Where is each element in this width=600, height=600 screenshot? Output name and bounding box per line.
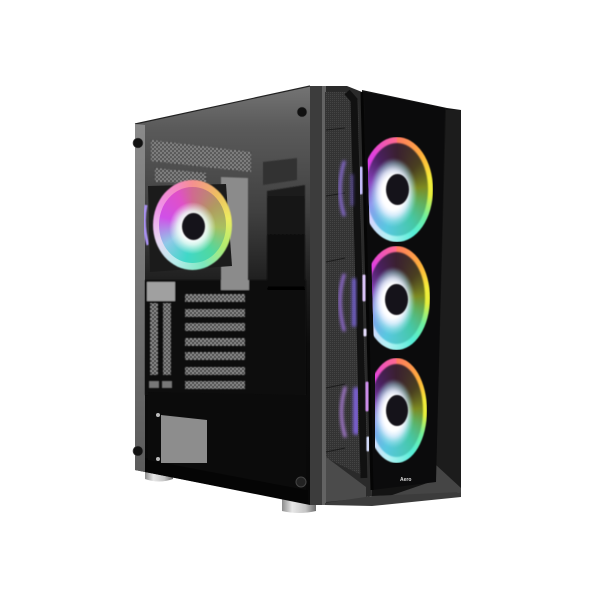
interior: psu shroud and panel [148,392,306,490]
front rgb fan 3 [375,358,427,463]
front right section [325,90,461,506]
ghost fan reflections [340,162,356,436]
front rgb fan 2 [372,246,430,350]
front pillar [310,86,372,505]
interior: vertical slots [149,303,172,388]
edge light strips [361,168,368,450]
glass side panel [135,86,310,505]
interior: motherboard plate [145,158,306,395]
brand logo: Aero [400,477,411,483]
right foot [282,498,316,513]
front black centre panel [362,92,445,490]
rear rgb fan [152,179,232,271]
left foot [145,470,173,482]
front left mesh panel [325,92,368,502]
interior: expansion slot covers [185,294,245,389]
glass screws [133,107,307,456]
interior: top vent [151,140,251,184]
front rgb fan 1 [368,137,433,242]
rear fan frame [144,184,232,272]
